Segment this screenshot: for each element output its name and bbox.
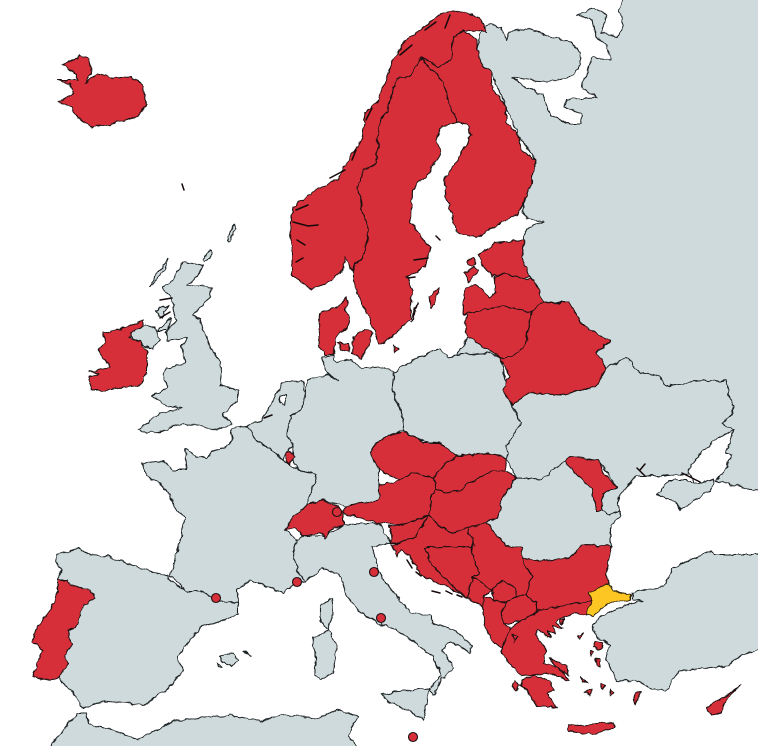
- Aegean islands: [512, 618, 641, 705]
- Portugal: [32, 580, 95, 681]
- Greece: [502, 601, 592, 681]
- Lithuania: [465, 306, 531, 358]
- Denmark: [318, 298, 372, 358]
- Andorra marker: [212, 594, 220, 602]
- Spain: [55, 548, 238, 708]
- Cyprus: [706, 685, 741, 715]
- Austria: [343, 473, 436, 525]
- North Macedonia: [501, 595, 537, 625]
- Montenegro: [467, 578, 492, 606]
- Croatia: [391, 515, 474, 598]
- Malta marker: [408, 732, 418, 742]
- coastline detail: fjords and archipelagos: [160, 15, 700, 597]
- Sweden: [353, 58, 457, 345]
- Ireland: [88, 320, 147, 390]
- Vatican marker: [376, 614, 386, 622]
- Finland: [421, 30, 536, 238]
- Bosnia and Herzegovina: [424, 546, 479, 598]
- Russia: [477, 0, 758, 495]
- Crimea: [657, 479, 714, 510]
- Switzerland: [285, 500, 343, 538]
- Monaco marker: [292, 578, 302, 586]
- Hebrides, Orkney and Shetland: [150, 223, 236, 330]
- Liechtenstein marker: [332, 508, 342, 516]
- Hungary: [429, 471, 516, 533]
- Euboea: [549, 658, 569, 675]
- Latvia: [463, 273, 543, 315]
- Serbia: [467, 523, 532, 596]
- Poland: [392, 349, 521, 458]
- Belarus: [501, 302, 611, 405]
- Peloponnese: [521, 675, 557, 708]
- Corsica: [320, 598, 333, 630]
- Slovenia: [389, 515, 429, 543]
- Anatolia: [592, 551, 758, 690]
- Kaliningrad: [457, 337, 489, 355]
- Turkish Thrace (yellow): [587, 583, 631, 616]
- Sardinia: [312, 631, 337, 680]
- Crete: [568, 722, 614, 734]
- Bulgaria: [523, 545, 611, 611]
- Sicily: [381, 688, 429, 720]
- Italy: [293, 523, 472, 695]
- Albania: [482, 596, 511, 648]
- Norway: [290, 10, 487, 290]
- France: [142, 426, 317, 603]
- Moldova: [564, 456, 617, 511]
- Balearic Islands: [217, 651, 252, 668]
- Kosovo: [492, 580, 516, 603]
- Iceland: [57, 55, 145, 128]
- Ukraine: [507, 358, 734, 515]
- Gotland, Oland and Bornholm: [394, 287, 439, 352]
- Estonia: [464, 240, 529, 282]
- Benelux: [247, 381, 305, 461]
- Czechia: [370, 433, 456, 481]
- San Marino marker: [370, 568, 378, 576]
- Luxembourg: [285, 450, 295, 464]
- Romania: [486, 460, 621, 561]
- North Africa: [40, 710, 368, 746]
- Northern Ireland: [128, 325, 160, 350]
- Netherlands inland lake: [279, 394, 287, 405]
- Slovakia: [434, 453, 507, 493]
- small-state markers: [212, 508, 418, 742]
- Germany: [287, 356, 404, 506]
- Great Britain: [138, 262, 238, 433]
